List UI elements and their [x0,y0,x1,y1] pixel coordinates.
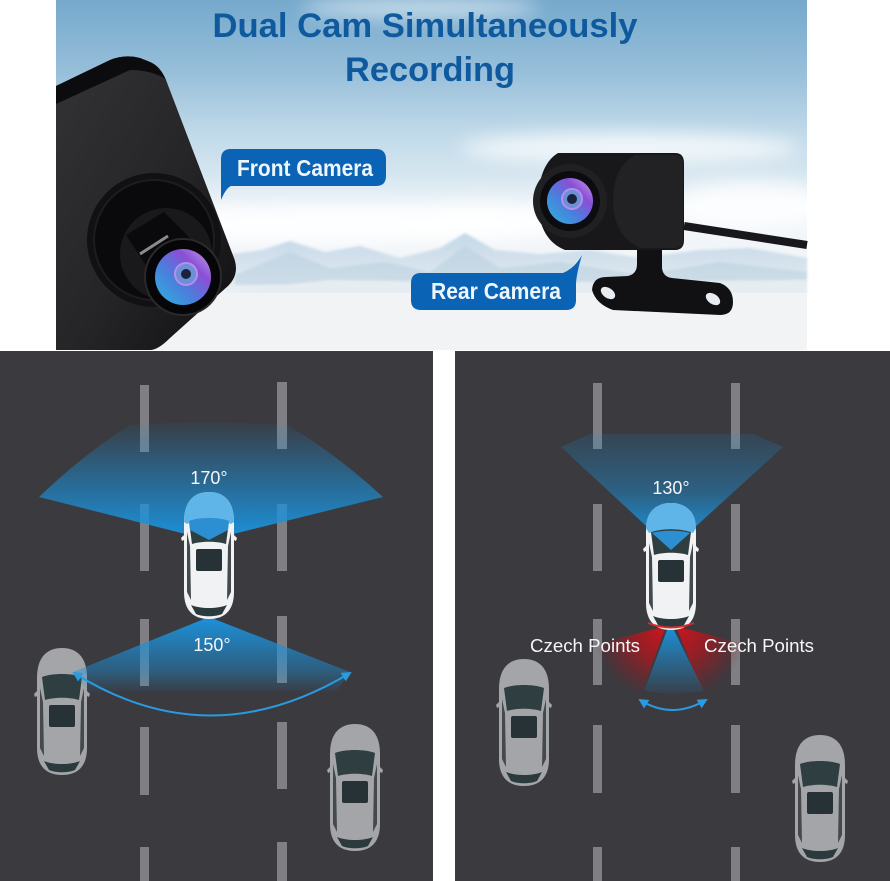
title [212,7,638,89]
rear view cone 150 degrees [73,617,350,700]
panel: blind spots [455,351,890,881]
icon: front camera [56,56,236,350]
road lane markings [140,382,287,881]
icon: rear camera [533,153,807,315]
panel: front and rear view angles [0,351,433,881]
text: 170 degrees: 170° [190,468,228,488]
title: Recording [345,51,515,89]
blind spot wedges [590,626,752,702]
arrow: rear sweep [640,700,706,710]
callout: rear camera [411,255,582,310]
sky background [56,0,807,350]
callout: front camera [221,149,386,200]
car: right lane [792,735,848,862]
text: right blind spot: Czech Points [704,635,814,656]
front view cone 170 degrees [39,422,383,540]
car: left lane [34,648,90,775]
text: left blind spot: Czech Points [530,635,640,656]
snow ground [150,293,807,350]
main car [643,503,699,630]
callout: front camera: Front Camera [237,155,373,181]
main car [181,492,237,619]
rear view cone [644,622,704,694]
snowy mountains [225,233,807,295]
title: Dual Cam Simultaneously [212,7,638,45]
car: left lane [496,659,552,786]
front view cone 130 degrees [561,434,783,549]
clouds [120,0,830,243]
text: 130 degrees: 130° [652,478,690,498]
road lane markings [593,383,740,881]
panel: banner [56,0,830,350]
text: 150 degrees: 150° [193,635,231,655]
car: right lane [327,724,383,851]
arrow: rear sweep [74,673,350,716]
callout: rear camera: Rear Camera [431,278,561,304]
